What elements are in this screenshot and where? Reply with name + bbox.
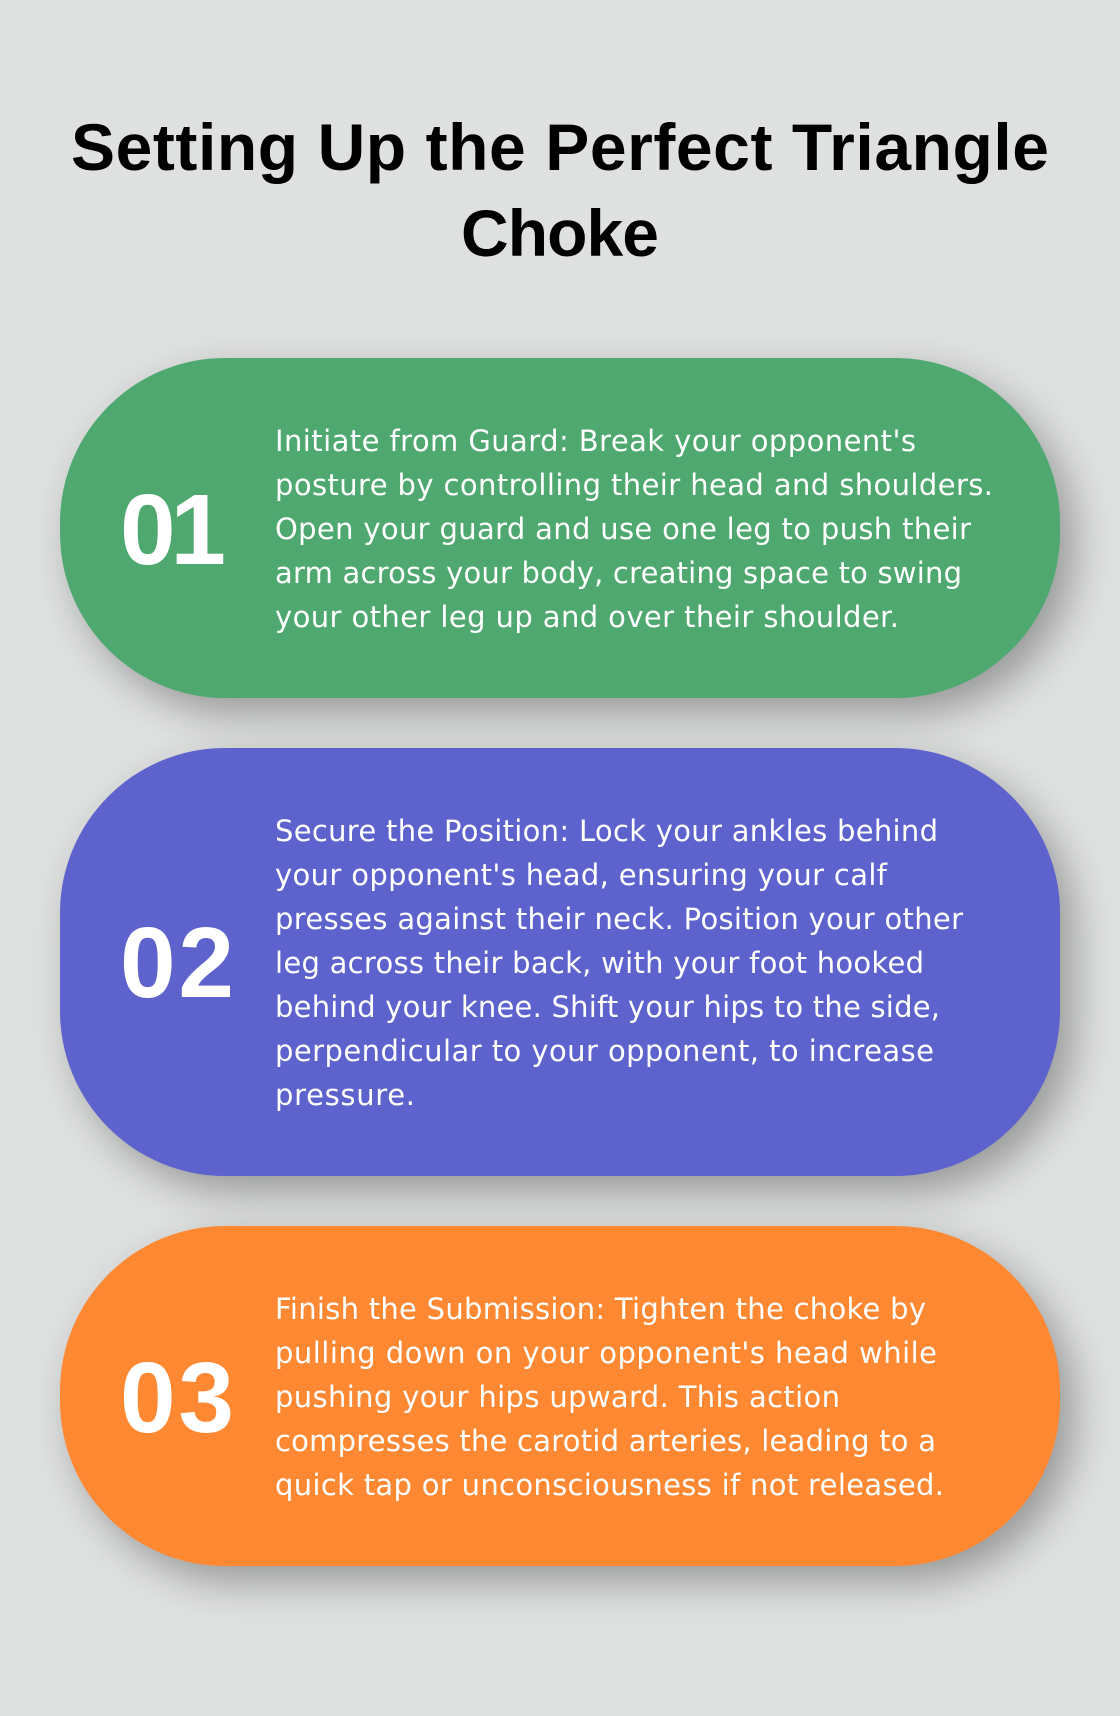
step 2 text: pressure.	[275, 1078, 415, 1112]
step 3 text	[275, 1292, 944, 1502]
panel: step 1 background	[60, 358, 1060, 698]
title: Setting Up the Perfect Triangle	[71, 110, 1049, 184]
step 3 text: Finish the Submission: Tighten the choke by	[275, 1292, 926, 1326]
step 2 text: your opponent's head, ensuring your calf	[275, 858, 888, 892]
step 2 text: Secure the Position: Lock your ankles behind	[275, 814, 938, 848]
step 2 text: perpendicular to your opponent, to increase	[275, 1034, 934, 1068]
panel: step 3 background	[60, 1226, 1060, 1566]
step 3 number: 03	[120, 1342, 234, 1454]
step 1 number: 01	[120, 474, 226, 586]
step 3 text: pulling down on your opponent's head while	[275, 1336, 937, 1370]
step 1 text: your other leg up and over their shoulder.	[275, 600, 899, 634]
step 2 text	[275, 814, 963, 1112]
step 1 text: Initiate from Guard: Break your opponent's	[275, 424, 916, 458]
step 3 text: pushing your hips upward. This action	[275, 1380, 840, 1414]
step 3 text: quick tap or unconsciousness if not released.	[275, 1468, 944, 1502]
title: Choke	[461, 196, 659, 270]
step 1 text	[275, 424, 993, 634]
step 1 text: Open your guard and use one leg to push their	[275, 512, 971, 546]
step 2 text: behind your knee. Shift your hips to the side,	[275, 990, 940, 1024]
step 3 text: compresses the carotid arteries, leading to a	[275, 1424, 936, 1458]
step 1 text: posture by controlling their head and shoulders.	[275, 468, 993, 502]
title	[71, 110, 1049, 270]
step 2 text: leg across their back, with your foot hooked	[275, 946, 924, 980]
step 2 number: 02	[120, 907, 234, 1019]
step 2 text: presses against their neck. Position your other	[275, 902, 963, 936]
panel: step 2 background	[60, 748, 1060, 1176]
step 1 text: arm across your body, creating space to swing	[275, 556, 962, 590]
